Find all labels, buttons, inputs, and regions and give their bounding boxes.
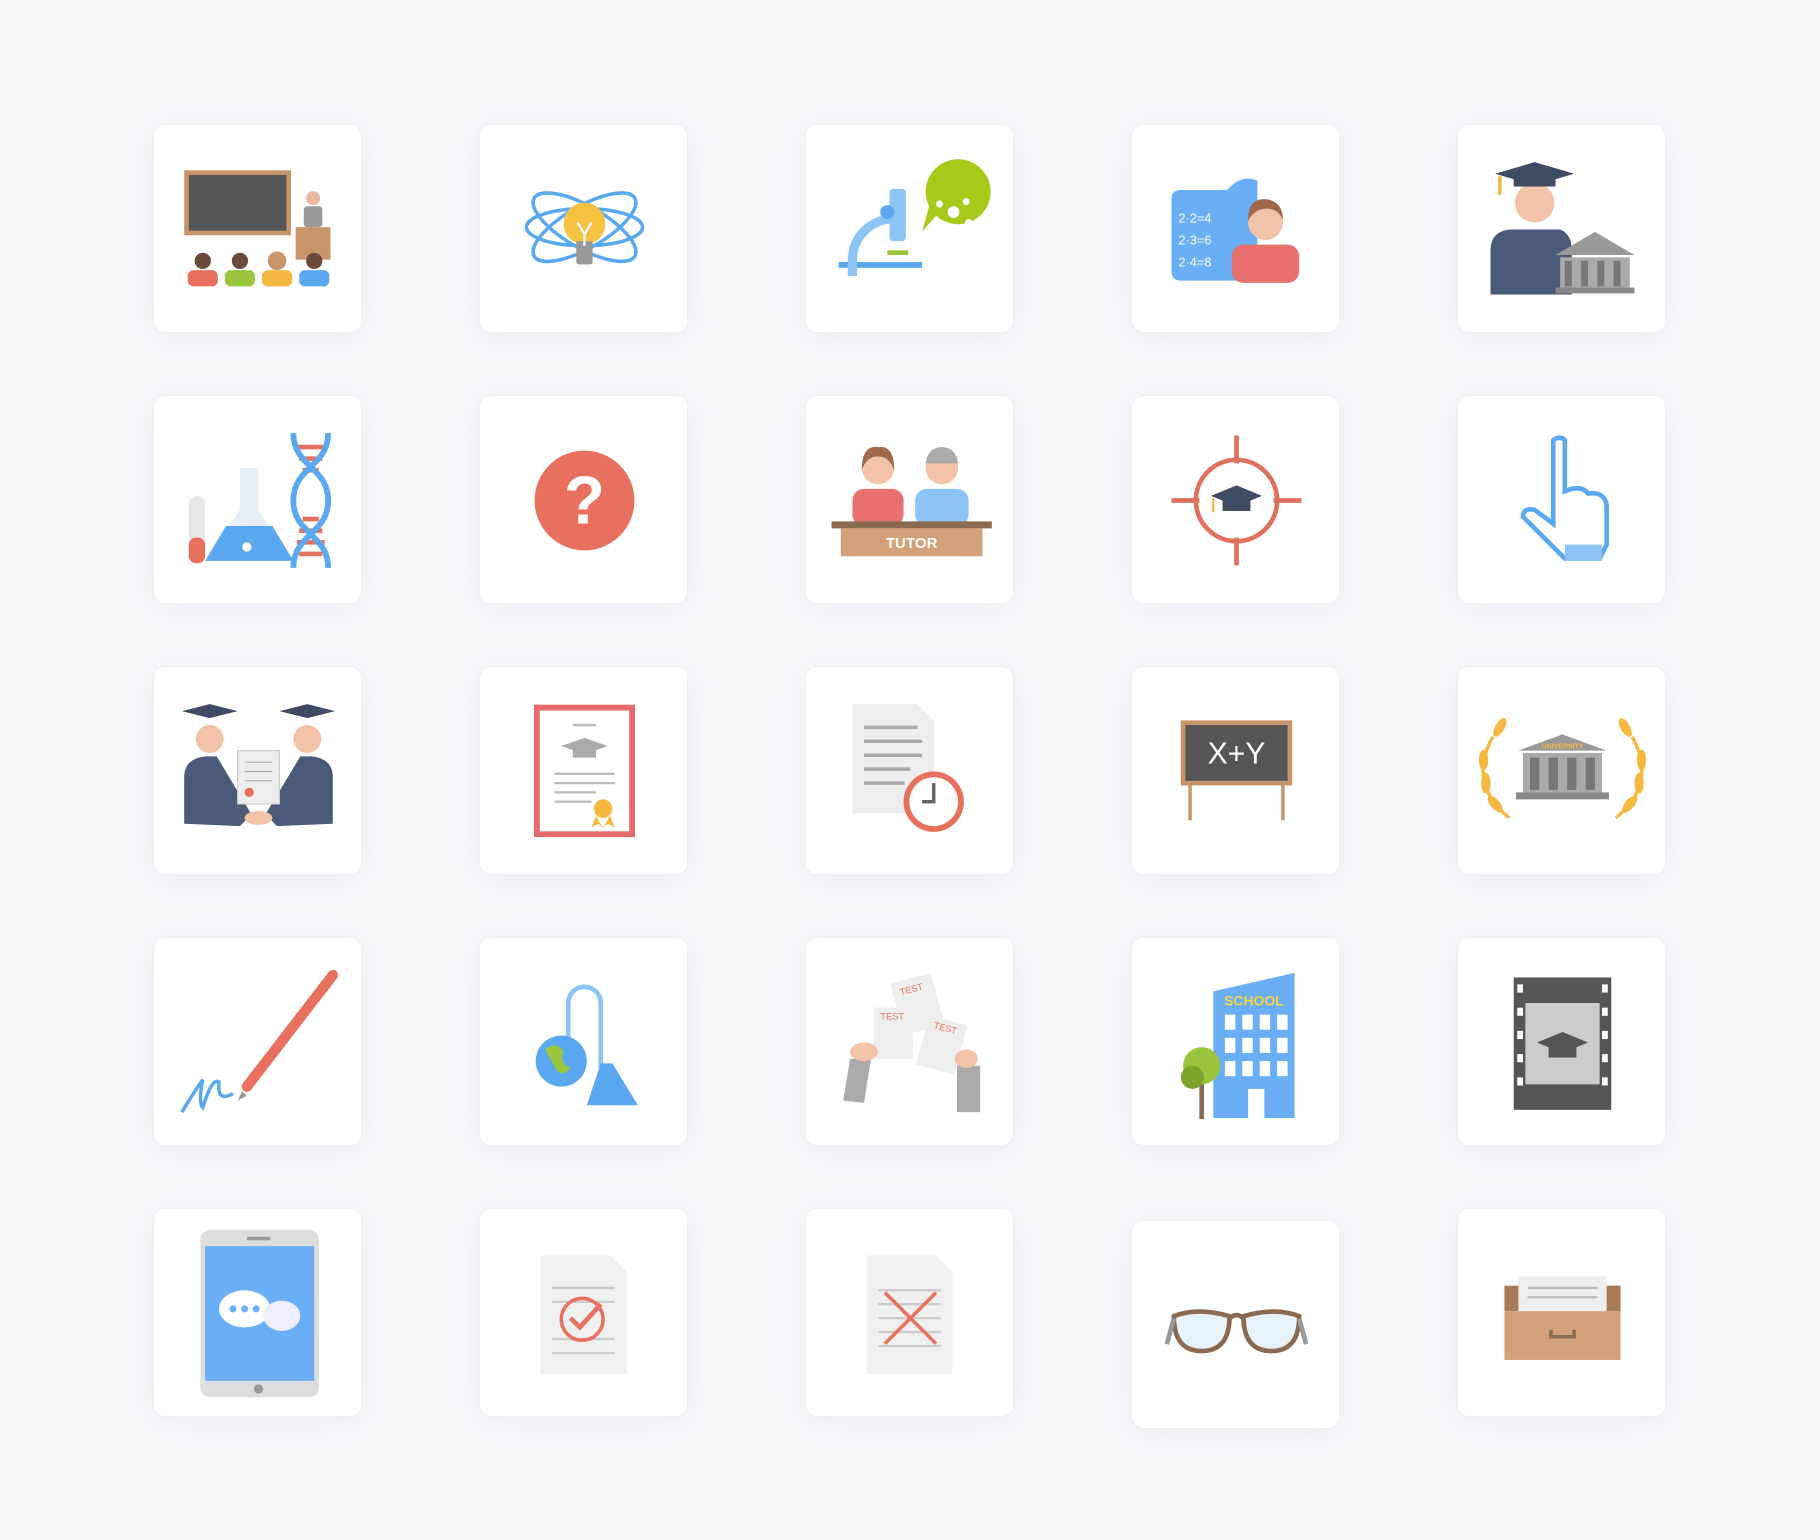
icon: board and person xyxy=(1171,179,1299,283)
icon: globe and flask xyxy=(536,987,638,1105)
card: document clock xyxy=(805,666,1014,875)
card: pencil xyxy=(153,937,362,1146)
icon: pencil scribble xyxy=(182,975,333,1112)
icon: board and person: 2·4=8 xyxy=(1178,255,1211,270)
icon: tube flask dna xyxy=(189,433,328,568)
icon: doc x xyxy=(866,1255,952,1374)
card: university laurel xyxy=(1457,666,1666,875)
icon: board and person: 2·2=4 xyxy=(1178,211,1211,226)
card: certificate xyxy=(479,666,688,875)
icon: blackboard: X+Y xyxy=(1208,737,1265,770)
card: doc check xyxy=(479,1208,688,1417)
icon: graduate xyxy=(1491,162,1634,295)
icon: glasses xyxy=(1167,1312,1306,1351)
card: drawer xyxy=(1457,1208,1666,1417)
card: doc cross xyxy=(805,1208,1014,1417)
card: graduate university xyxy=(1457,124,1666,333)
icon: question mark: ? xyxy=(564,464,605,539)
card: math teacher xyxy=(1131,124,1340,333)
icon: atom bulb xyxy=(524,180,645,274)
icon: target cap xyxy=(1171,435,1302,566)
icon: test papers xyxy=(843,973,980,1112)
card: classroom xyxy=(153,124,362,333)
icon: microscope with bubble xyxy=(839,159,991,276)
icon: test papers: TEST xyxy=(933,1020,958,1036)
icon: tutor desk: TUTOR xyxy=(886,535,938,552)
icon: film xyxy=(1514,977,1611,1110)
card: target xyxy=(1131,395,1340,604)
card: microscope xyxy=(805,124,1014,333)
card: chemistry dna xyxy=(153,395,362,604)
card: tutor xyxy=(805,395,1014,604)
icon: test papers: TEST xyxy=(899,982,924,997)
icon: doc check xyxy=(540,1255,626,1374)
card: atom lightbulb xyxy=(479,124,688,333)
card: globe flask xyxy=(479,937,688,1146)
icon: diploma xyxy=(537,708,632,834)
icon: university: UNIVERSITY xyxy=(1542,743,1584,750)
card: tablet chat xyxy=(153,1208,362,1417)
icon: doc clock xyxy=(852,704,964,832)
card: pointing hand xyxy=(1457,395,1666,604)
icon: school building: SCHOOL xyxy=(1224,992,1284,1008)
icon: blackboard and students xyxy=(187,173,330,286)
icon: tutor desk xyxy=(832,447,992,556)
icon: question mark xyxy=(535,451,634,550)
card: graduates handshake xyxy=(153,666,362,875)
card: question xyxy=(479,395,688,604)
icon: blackboard xyxy=(1183,723,1290,820)
icon: hand xyxy=(1523,438,1607,561)
card: blackboard x+y xyxy=(1131,666,1340,875)
icon: graduates xyxy=(182,704,335,826)
card: tests hands xyxy=(805,937,1014,1146)
card: school xyxy=(1131,937,1340,1146)
icon: test papers: TEST xyxy=(880,1011,904,1021)
card: glasses xyxy=(1131,1220,1340,1429)
card: film strip xyxy=(1457,937,1666,1146)
icon: university xyxy=(1479,716,1646,818)
icon: school building xyxy=(1181,973,1295,1119)
icon: board and person: 2·3=6 xyxy=(1178,233,1211,248)
icon: file drawer xyxy=(1504,1276,1621,1360)
icon: tablet xyxy=(200,1230,319,1397)
